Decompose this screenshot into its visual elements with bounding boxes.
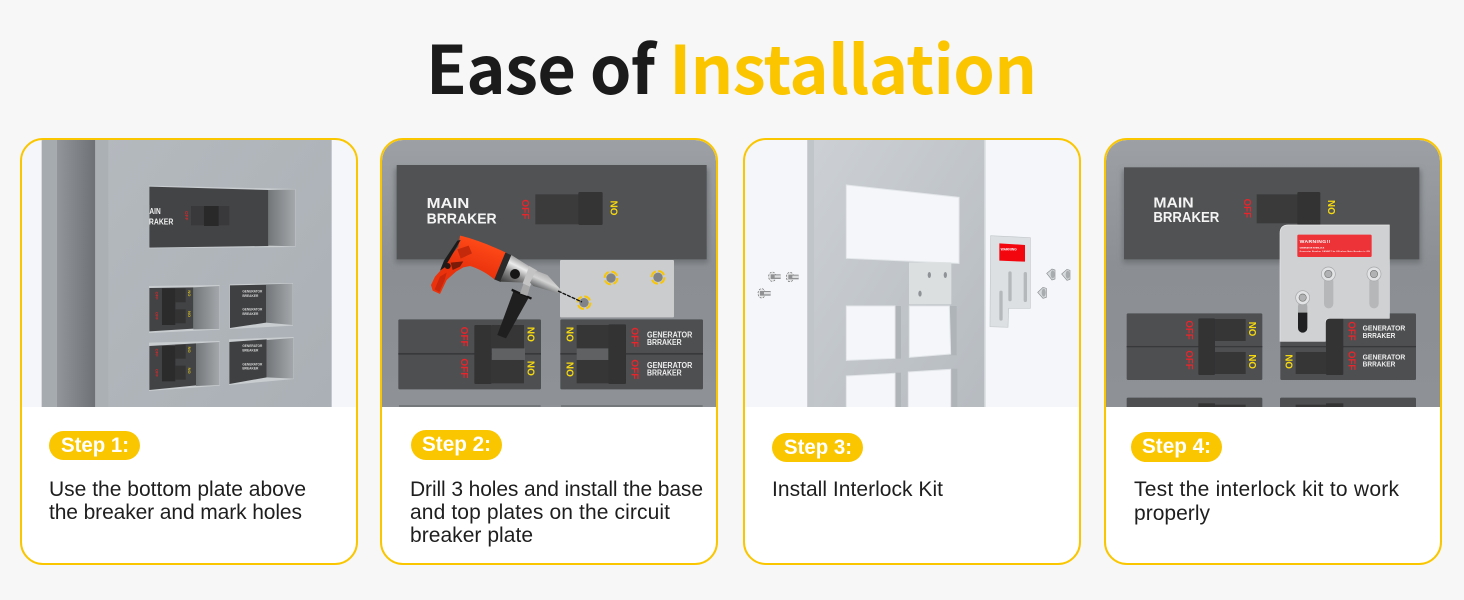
illustration: breaker panel cover: BREAKER xyxy=(242,348,259,352)
step badge xyxy=(411,430,502,460)
illustration: drilling holes: ON xyxy=(609,201,620,215)
bolts xyxy=(1296,267,1381,305)
left breakers: ON xyxy=(1248,354,1259,369)
right breakers: BRRAKER xyxy=(1363,331,1396,340)
right breakers xyxy=(560,319,703,389)
illustration: breaker panel cover: BREAKER xyxy=(242,367,259,371)
right breakers: ON xyxy=(565,327,576,342)
right breakers: OFF xyxy=(1345,351,1356,370)
description: breaker plate xyxy=(410,524,533,547)
right breakers: BRRAKER xyxy=(647,338,682,347)
description: Use the bottom plate above xyxy=(49,478,306,501)
card border xyxy=(744,139,1080,564)
icon: screws xyxy=(758,272,799,298)
card background xyxy=(1105,139,1441,564)
card border xyxy=(1105,139,1441,564)
right breakers: ON xyxy=(565,362,576,377)
card background xyxy=(744,139,1080,564)
illustration: installed interlock: BRRAKER xyxy=(1153,210,1220,226)
left breakers: OFF xyxy=(1183,350,1194,370)
illustration: breaker panel cover: ON xyxy=(187,290,192,296)
top plate with warning label: WARNING xyxy=(1001,247,1017,251)
description: the breaker and mark holes xyxy=(49,501,302,524)
left breakers xyxy=(1127,313,1262,380)
illustration: breaker panel cover: GENERATOR xyxy=(242,362,263,366)
right breakers: GENERATOR xyxy=(647,330,693,339)
illustration: breaker panel cover: GENERATOR xyxy=(242,344,263,348)
illustration: drilling holes xyxy=(381,139,717,408)
illustration: breaker panel cover: BREAKER xyxy=(242,312,259,316)
base plate xyxy=(909,262,951,304)
step badge: Step 3: xyxy=(784,436,852,459)
description: Drill 3 holes and install the base xyxy=(410,478,703,501)
title: Ease of Installation xyxy=(426,18,1037,114)
illustration: installed interlock xyxy=(1105,139,1441,411)
card border xyxy=(21,139,357,564)
right breakers: GENERATOR xyxy=(647,361,693,370)
description: Test the interlock kit to work xyxy=(1134,478,1400,501)
illustration: breaker panel cover: ON xyxy=(187,368,192,374)
warning label: GENERATOR INTERLOCK xyxy=(1300,247,1325,250)
description: and top plates on the circuit xyxy=(410,501,670,524)
right breakers: BRRAKER xyxy=(647,368,682,377)
icon: nuts xyxy=(1038,269,1070,298)
right breakers: GENERATOR xyxy=(1363,352,1406,361)
illustration: breaker panel cover: GENERATOR xyxy=(242,290,263,294)
step badge: Step 1: xyxy=(61,434,129,457)
panel: step 1 xyxy=(21,130,357,564)
illustration: drilling holes: MAIN xyxy=(427,195,469,212)
warning label xyxy=(1297,235,1372,257)
left breakers: ON xyxy=(527,361,538,376)
right breakers: OFF xyxy=(1345,321,1356,341)
left breakers: OFF xyxy=(458,327,469,347)
illustration: installed interlock: ON xyxy=(1327,200,1338,215)
illustration: exploded interlock kit xyxy=(744,130,1080,410)
step badge: Step 2: xyxy=(422,433,491,456)
illustration: drilling holes: BRRAKER xyxy=(427,210,497,227)
illustration: breaker panel cover: OFF xyxy=(154,312,159,321)
card background xyxy=(21,139,357,564)
illustration: breaker panel cover xyxy=(21,130,357,410)
base plate xyxy=(560,260,674,317)
panel: step 2 xyxy=(381,139,717,564)
left breakers xyxy=(398,319,541,389)
description: properly xyxy=(1134,502,1210,525)
left breakers: OFF xyxy=(458,358,469,378)
warning label: Generator Breaker CANNOT be ON when Main Breaker is ON xyxy=(1300,250,1370,253)
interlock plate xyxy=(1280,225,1389,341)
warning label: WARNING!! xyxy=(1300,239,1331,245)
step badge xyxy=(772,433,863,462)
right breakers: OFF xyxy=(629,359,640,379)
right breakers: ON xyxy=(1284,354,1295,369)
illustration: installed interlock: MAIN xyxy=(1153,196,1194,212)
panel: step 3 xyxy=(744,130,1080,564)
illustration: breaker panel cover: GENERATOR xyxy=(242,307,263,311)
illustration: breaker panel cover: OFF xyxy=(154,349,159,357)
illustration: breaker panel cover: BREAKER xyxy=(242,294,259,298)
illustration: breaker panel cover: ON xyxy=(187,311,192,317)
slots xyxy=(1298,277,1379,333)
card border xyxy=(381,139,717,564)
step badge: Step 4: xyxy=(1142,435,1211,458)
illustration: breaker panel cover: MAIN xyxy=(144,206,161,216)
panel: step 4 xyxy=(1105,139,1441,564)
left breakers: OFF xyxy=(1183,320,1194,340)
illustration: breaker panel cover: OFF xyxy=(154,292,159,300)
left breakers: ON xyxy=(527,327,538,342)
step badge xyxy=(1131,432,1222,462)
right breakers: OFF xyxy=(629,327,640,347)
description: Install Interlock Kit xyxy=(772,478,943,501)
right breakers: GENERATOR xyxy=(1363,324,1406,333)
lower breaker row xyxy=(1126,398,1416,407)
illustration: drilling holes: OFF xyxy=(519,199,530,219)
illustration: breaker panel cover: ON xyxy=(187,347,192,353)
top plate with warning label xyxy=(990,236,1030,327)
illustration: installed interlock: OFF xyxy=(1241,199,1252,218)
illustration: breaker panel cover: BRAKER xyxy=(144,216,173,226)
right breakers: BRRAKER xyxy=(1363,360,1396,369)
card background xyxy=(381,139,717,564)
right breakers xyxy=(1280,313,1416,380)
illustration: breaker panel cover: OFF xyxy=(184,211,189,220)
left breakers: ON xyxy=(1248,322,1259,336)
step badge xyxy=(49,431,140,460)
icon: power drill xyxy=(431,236,582,338)
illustration: breaker panel cover: OFF xyxy=(154,369,159,378)
